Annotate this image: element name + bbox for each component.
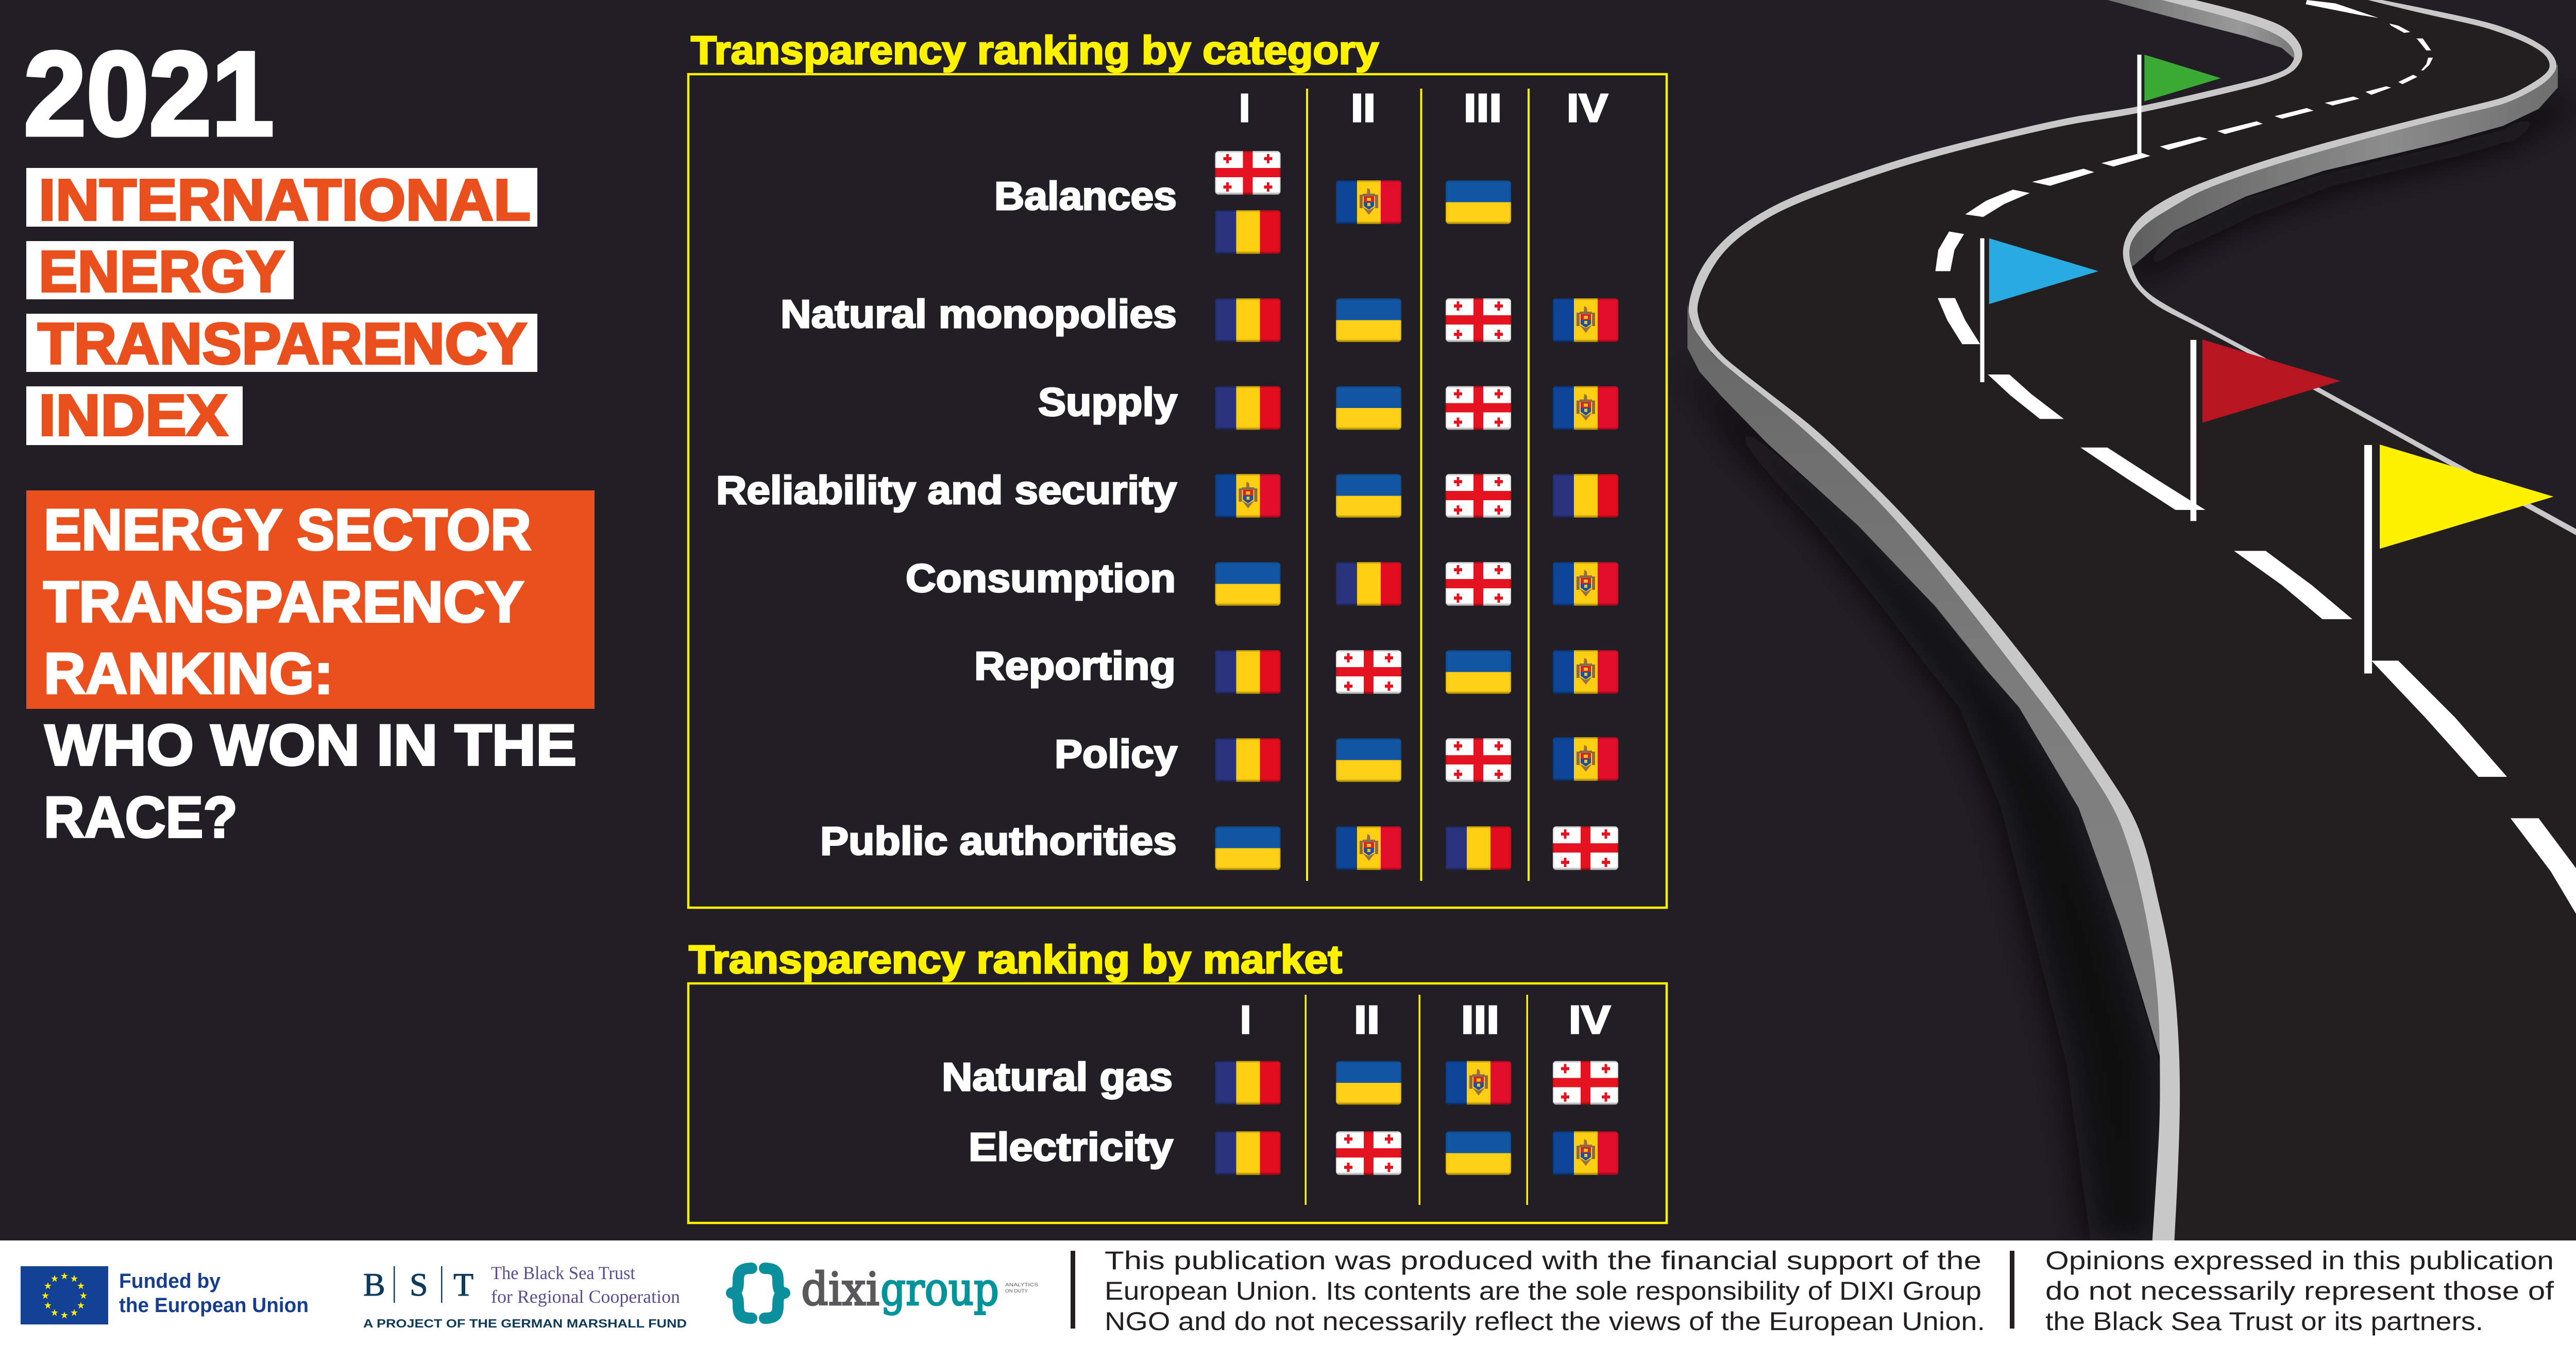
funding disclaimer: NGO and do not necessarily reflect the views of the European Union. bbox=[1105, 1307, 1985, 1336]
funding disclaimer: European Union. Its contents are the sole responsibility of DIXI Group bbox=[1105, 1277, 1981, 1305]
heading: ranking by market: Transparency ranking by market bbox=[689, 938, 1342, 982]
heading: ranking by category: Transparency ranking by category bbox=[691, 28, 1379, 73]
logo: Black Sea Trust: A PROJECT OF THE GERMAN MARSHALL FUND bbox=[363, 1317, 687, 1330]
column numerals: I bbox=[1239, 86, 1250, 130]
opinions disclaimer: the Black Sea Trust or its partners. bbox=[2045, 1307, 2483, 1336]
row: Policy: Policy bbox=[1055, 732, 1177, 776]
flag: green bbox=[2137, 55, 2221, 154]
label: energy: ENERGY bbox=[39, 239, 285, 304]
row: Reporting bbox=[974, 644, 1618, 694]
logo: DiXi Group bbox=[732, 1263, 1038, 1318]
flag: yellow bbox=[2364, 445, 2553, 673]
row: Public authorities: Public authorities bbox=[820, 819, 1177, 863]
label: index: INDEX bbox=[39, 383, 228, 448]
logo: Black Sea Trust: The Black Sea Trust bbox=[491, 1263, 635, 1283]
divider bbox=[1071, 1251, 1075, 1329]
panel: ranking by category bbox=[688, 74, 1667, 908]
logo: DiXi Group: ANALYTICS bbox=[1005, 1282, 1038, 1287]
market column numerals: III bbox=[1461, 998, 1499, 1042]
row: Natural gas bbox=[942, 1055, 1618, 1105]
panel: ranking by market bbox=[688, 983, 1667, 1223]
row: Balances bbox=[994, 151, 1511, 254]
road shadow bbox=[1687, 88, 2563, 1243]
dixi brace icon bbox=[732, 1268, 785, 1318]
subtitle line 3: RANKING: bbox=[44, 641, 333, 706]
funding disclaimer bbox=[1105, 1246, 1985, 1336]
flag: blue bbox=[1980, 239, 2098, 382]
market column numerals: II bbox=[1354, 998, 1380, 1042]
logo: Black Sea Trust: B bbox=[363, 1266, 385, 1303]
row: Natural monopolies: Natural monopolies bbox=[781, 292, 1177, 336]
market table border bbox=[688, 983, 1667, 1223]
opinions disclaimer: do not necessarily represent those of bbox=[2045, 1277, 2554, 1305]
row: Reliability and security bbox=[716, 468, 1618, 518]
logo: Black Sea Trust: S bbox=[410, 1266, 428, 1303]
logo: DiXi Group: ON DUTY bbox=[1005, 1288, 1028, 1294]
road centre dashes bbox=[1936, 0, 2576, 931]
market column separators bbox=[1304, 995, 1528, 1205]
logo: Black Sea Trust: for Regional Cooperation bbox=[491, 1286, 680, 1307]
flag: red bbox=[2191, 339, 2341, 521]
opinions disclaimer: Opinions expressed in this publication bbox=[2045, 1246, 2554, 1275]
column separators bbox=[1306, 89, 1530, 881]
row: Natural gas: Natural gas bbox=[942, 1055, 1173, 1099]
row: Policy bbox=[1055, 732, 1618, 782]
row: Balances: Balances bbox=[994, 174, 1177, 218]
row: Electricity bbox=[969, 1125, 1618, 1176]
label: transparency: TRANSPARENCY bbox=[38, 311, 527, 376]
year: 2021 bbox=[24, 27, 274, 161]
row: Public authorities bbox=[820, 819, 1618, 871]
market column numerals: I bbox=[1240, 998, 1251, 1042]
logo: EU flag and text bbox=[21, 1266, 309, 1324]
subtitle orange panel bbox=[26, 490, 595, 709]
road edge strip bbox=[1689, 0, 2576, 1243]
column numerals: IV bbox=[1567, 86, 1608, 130]
row: Reporting: Reporting bbox=[974, 644, 1176, 688]
subtitle line 4: WHO WON IN THE bbox=[45, 713, 577, 777]
subtitle line 1: ENERGY SECTOR bbox=[44, 498, 531, 562]
label: international: INTERNATIONAL bbox=[39, 167, 531, 232]
row: Supply bbox=[1038, 380, 1618, 430]
funding disclaimer: This publication was produced with the financial support of the bbox=[1105, 1246, 1981, 1275]
subtitle line 2: TRANSPARENCY bbox=[43, 570, 524, 634]
subtitle block bbox=[26, 490, 595, 849]
subtitle line 5: RACE? bbox=[44, 785, 238, 849]
row: Consumption: Consumption bbox=[906, 556, 1176, 601]
logo: EU flag and text: the European Union bbox=[119, 1294, 309, 1317]
logo: DiXi Group: dixi bbox=[801, 1263, 879, 1316]
row: Consumption bbox=[906, 556, 1618, 606]
footer band bbox=[0, 1240, 2576, 1361]
row: Supply: Supply bbox=[1038, 380, 1177, 424]
divider bbox=[2010, 1251, 2014, 1329]
logo: DiXi Group: group bbox=[880, 1263, 999, 1316]
title block bbox=[24, 27, 537, 448]
column numerals: III bbox=[1464, 86, 1502, 130]
row: Electricity: Electricity bbox=[969, 1125, 1173, 1169]
logo: Black Sea Trust bbox=[363, 1263, 687, 1330]
logo: EU flag and text: Funded by bbox=[119, 1270, 221, 1292]
category table border bbox=[688, 74, 1667, 908]
row: Natural monopolies bbox=[781, 292, 1618, 342]
column numerals bbox=[1239, 86, 1608, 130]
road surface bbox=[1698, 0, 2576, 1243]
logo: Black Sea Trust: T bbox=[453, 1266, 473, 1303]
row: Reliability and security: Reliability and security bbox=[716, 468, 1177, 513]
road illustration bbox=[1687, 0, 2576, 1243]
road side walls bbox=[1687, 0, 2558, 1065]
market column numerals: IV bbox=[1569, 998, 1611, 1042]
opinions disclaimer bbox=[2045, 1246, 2554, 1336]
column numerals: II bbox=[1351, 86, 1376, 130]
market column numerals bbox=[1240, 998, 1611, 1042]
